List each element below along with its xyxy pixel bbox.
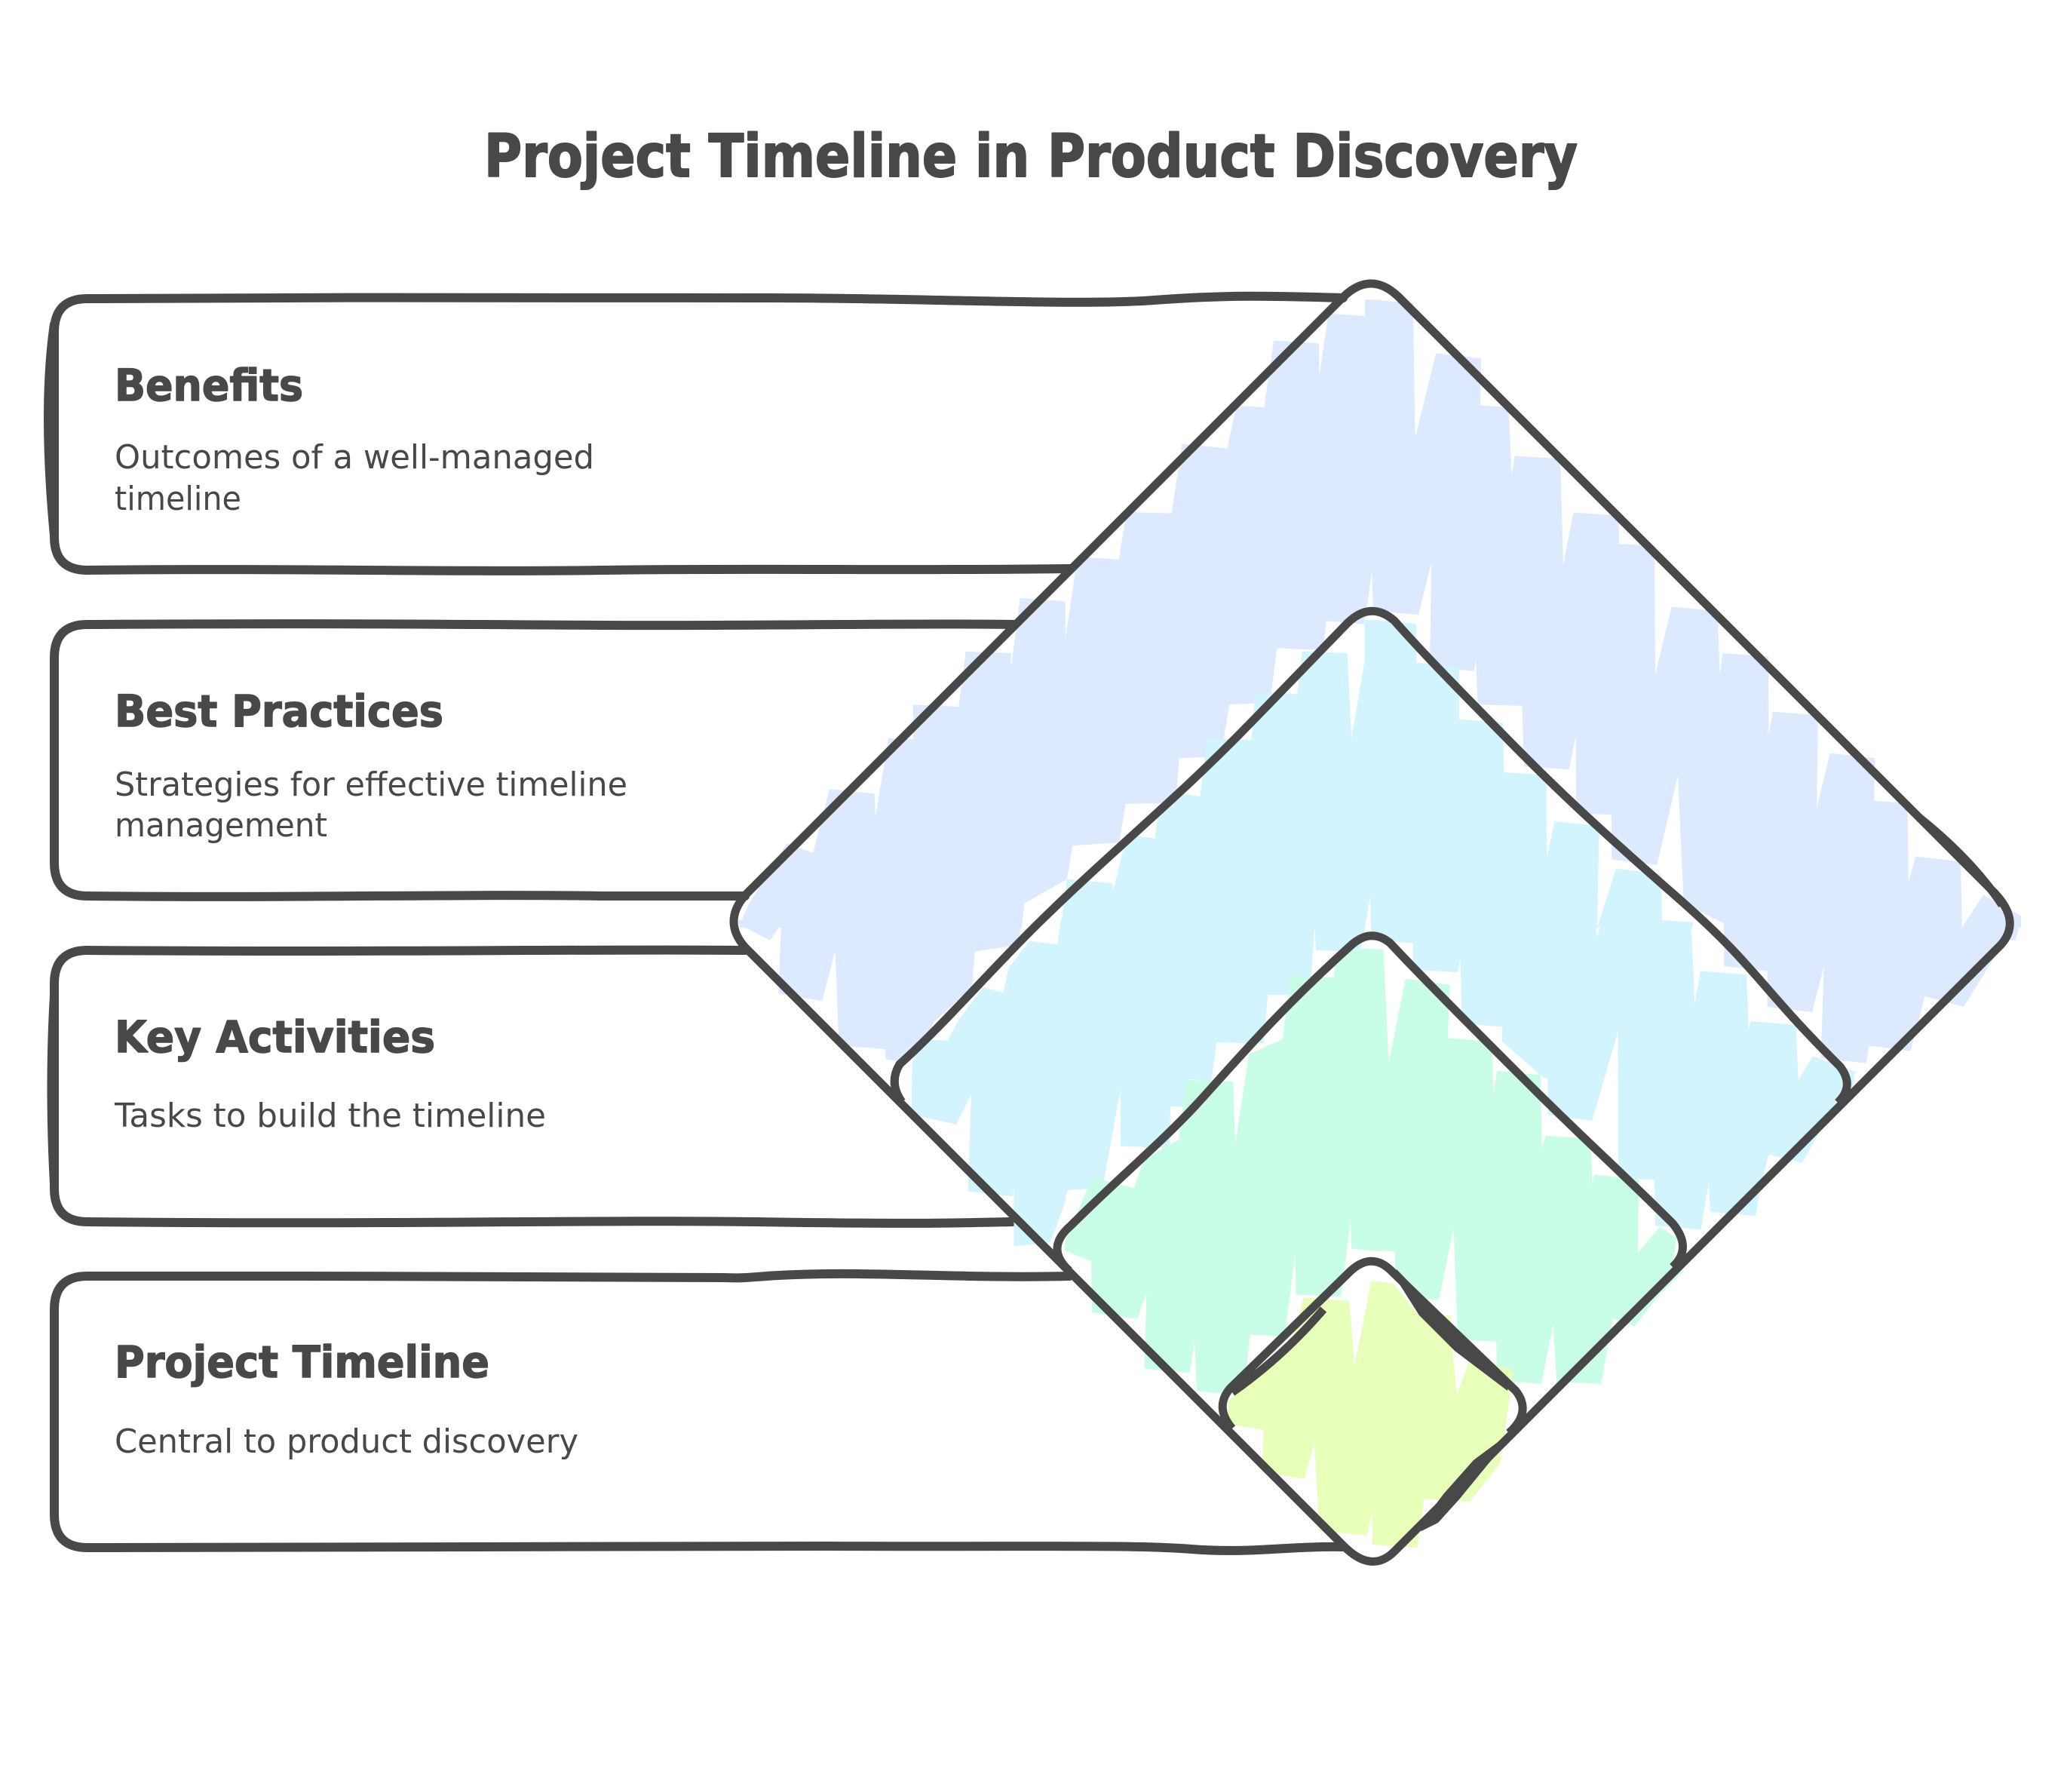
diamond outline: project timeline <box>1222 1261 1523 1531</box>
diamond fill: project timeline layer <box>1228 1281 1513 1548</box>
heading: best practices: Best Practices <box>115 686 443 737</box>
diamond outline: best practices <box>894 611 1847 1103</box>
panel: project timeline <box>54 1274 1343 1551</box>
description: benefits: timeline <box>115 480 241 518</box>
diamond fill: key activities layer <box>1065 949 1683 1395</box>
description: key activities: Tasks to build the timeline <box>114 1097 546 1135</box>
diamond outline: benefits <box>734 284 2010 1561</box>
diamond fill: best practices layer <box>912 620 1855 1247</box>
heading: key activities: Key Activities <box>115 1011 435 1063</box>
description: project timeline: Central to product discovery <box>115 1422 578 1461</box>
description: best practices: Strategies for effective timeline <box>115 766 627 804</box>
panel: key activities <box>51 950 1013 1223</box>
heading: project timeline: Project Timeline <box>115 1336 489 1388</box>
panel: best practices <box>54 624 1014 897</box>
title: Project Timeline in Product Discovery <box>484 123 1578 191</box>
diamond fill: benefits layer <box>738 299 2021 1063</box>
heading: benefits: Benefits <box>115 360 303 411</box>
diamond outline: key activities <box>1057 936 1683 1271</box>
description: benefits: Outcomes of a well-managed <box>115 438 594 477</box>
description: benefits <box>115 438 594 518</box>
box outline: key activities <box>51 950 1013 1223</box>
box outline: best practices <box>54 624 1014 897</box>
panel: benefits <box>48 296 1343 571</box>
description: best practices <box>115 766 627 845</box>
box outline: benefits <box>48 296 1343 571</box>
box outline: project timeline <box>54 1274 1343 1551</box>
description: best practices: management <box>115 806 327 845</box>
